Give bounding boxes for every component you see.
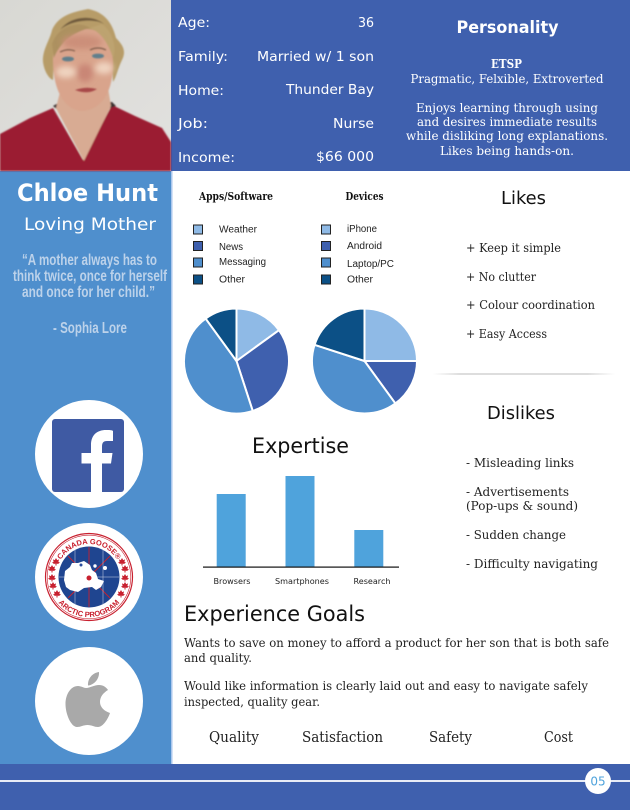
personality text: and desires immediate results: [417, 114, 597, 129]
footer band: [0, 764, 630, 810]
personality text: ETSP: [491, 56, 522, 71]
home: Home:: [178, 83, 224, 99]
devices legend: iPhone: [347, 224, 377, 235]
apps/software legend: Other: [219, 274, 246, 286]
likes list: + Keep it simple: [466, 240, 561, 255]
devices legend: [322, 189, 394, 286]
role: Loving Mother: [24, 215, 156, 235]
dislikes panel: [466, 404, 598, 571]
page number: [585, 768, 611, 794]
home: Thunder Bay: [285, 82, 374, 98]
demographics list: [177, 15, 374, 166]
bar chart: expertise: Browsers: [214, 577, 250, 586]
personality text: Pragmatic, Felxible, Extroverted: [410, 71, 604, 86]
goals heading: Experience Goals: [184, 602, 365, 626]
apps/software legend: Messaging: [219, 257, 266, 268]
apps/software legend: Apps/Software: [198, 189, 273, 203]
personality text: Enjoys learning through using: [416, 100, 598, 115]
icon: canada goose arctic program badge: [35, 523, 143, 631]
quote: [13, 252, 167, 337]
devices legend: Android: [347, 241, 382, 252]
apps/software legend: News: [219, 242, 243, 253]
dislikes list: - Difficulty navigating: [466, 556, 598, 571]
goals text: Wants to save on money to afford a product for her son that is both safe: [184, 635, 609, 650]
quote: think twice, once for herself: [13, 268, 167, 285]
personality text: while disliking long explanations.: [406, 128, 608, 143]
experience goals: [184, 602, 609, 746]
goal criteria: Satisfaction: [302, 730, 383, 746]
goals text: [184, 635, 609, 709]
likes list: [466, 240, 595, 341]
personality heading: Personality: [456, 18, 558, 38]
job: [177, 116, 374, 132]
quote: - Sophia Lore: [53, 320, 127, 337]
apps/software legend: [194, 189, 273, 286]
pie chart: apps/software: [184, 308, 289, 413]
age: [178, 15, 374, 31]
portrait photo: [0, 0, 171, 171]
bar chart: expertise: Smartphones: [275, 577, 329, 586]
quote: “A mother always has to: [22, 252, 157, 269]
sidebar identity: [17, 179, 158, 235]
bar chart: expertise: [203, 476, 399, 586]
dislikes list: - Sudden change: [466, 527, 566, 542]
name: Chloe Hunt: [17, 179, 158, 207]
header band: [171, 0, 630, 171]
income: Income:: [178, 150, 235, 166]
likes panel: [466, 189, 595, 341]
goal criteria: Quality: [209, 730, 260, 746]
personality text: [406, 56, 608, 158]
icon: canada goose arctic program badge: ARCTIC PROGRAM: [58, 600, 120, 618]
dislikes heading: Dislikes: [487, 404, 555, 424]
family: [178, 49, 374, 65]
family: Married w/ 1 son: [257, 49, 374, 65]
job: Nurse: [333, 116, 374, 132]
expertise heading: Expertise: [252, 434, 349, 458]
left sidebar panel: [0, 171, 171, 764]
dislikes list: - Misleading links: [466, 455, 574, 470]
home: [178, 82, 374, 99]
pie chart: devices: [312, 308, 417, 413]
bar chart: expertise: Research: [354, 577, 390, 586]
likes heading: Likes: [501, 189, 546, 209]
devices legend: Other: [347, 274, 374, 286]
goal criteria: Safety: [429, 730, 473, 746]
goals text: inspected, quality gear.: [184, 694, 320, 709]
goal criteria: [209, 730, 573, 746]
income: $66 000: [316, 149, 374, 165]
personality panel: [406, 18, 608, 158]
family: Family:: [178, 49, 228, 65]
dislikes list: [466, 455, 598, 571]
quote: and once for her child.”: [22, 284, 155, 301]
icon: canada goose arctic program badge: CANADA GOOSE®: [58, 539, 120, 559]
icon: apple: [35, 647, 143, 755]
dislikes list: (Pop-ups & sound): [466, 498, 578, 513]
apps/software legend: Weather: [219, 224, 258, 236]
dislikes list: - Advertisements: [466, 484, 569, 499]
page number: 05: [590, 774, 606, 788]
goal criteria: Cost: [544, 730, 573, 746]
devices legend: Devices: [346, 189, 384, 203]
likes list: + No clutter: [466, 269, 536, 284]
personality text: Likes being hands-on.: [440, 143, 574, 158]
goals text: Would like information is clearly laid out and easy to navigate safely: [184, 678, 589, 693]
job: Job:: [177, 116, 208, 132]
likes list: + Easy Access: [466, 326, 547, 341]
devices legend: Laptop/PC: [347, 259, 394, 270]
goals text: and quality.: [184, 650, 252, 665]
likes list: + Colour coordination: [466, 297, 595, 312]
age: Age:: [178, 15, 210, 31]
age: 36: [358, 15, 374, 31]
icon: facebook: [35, 400, 143, 508]
income: [178, 149, 374, 166]
